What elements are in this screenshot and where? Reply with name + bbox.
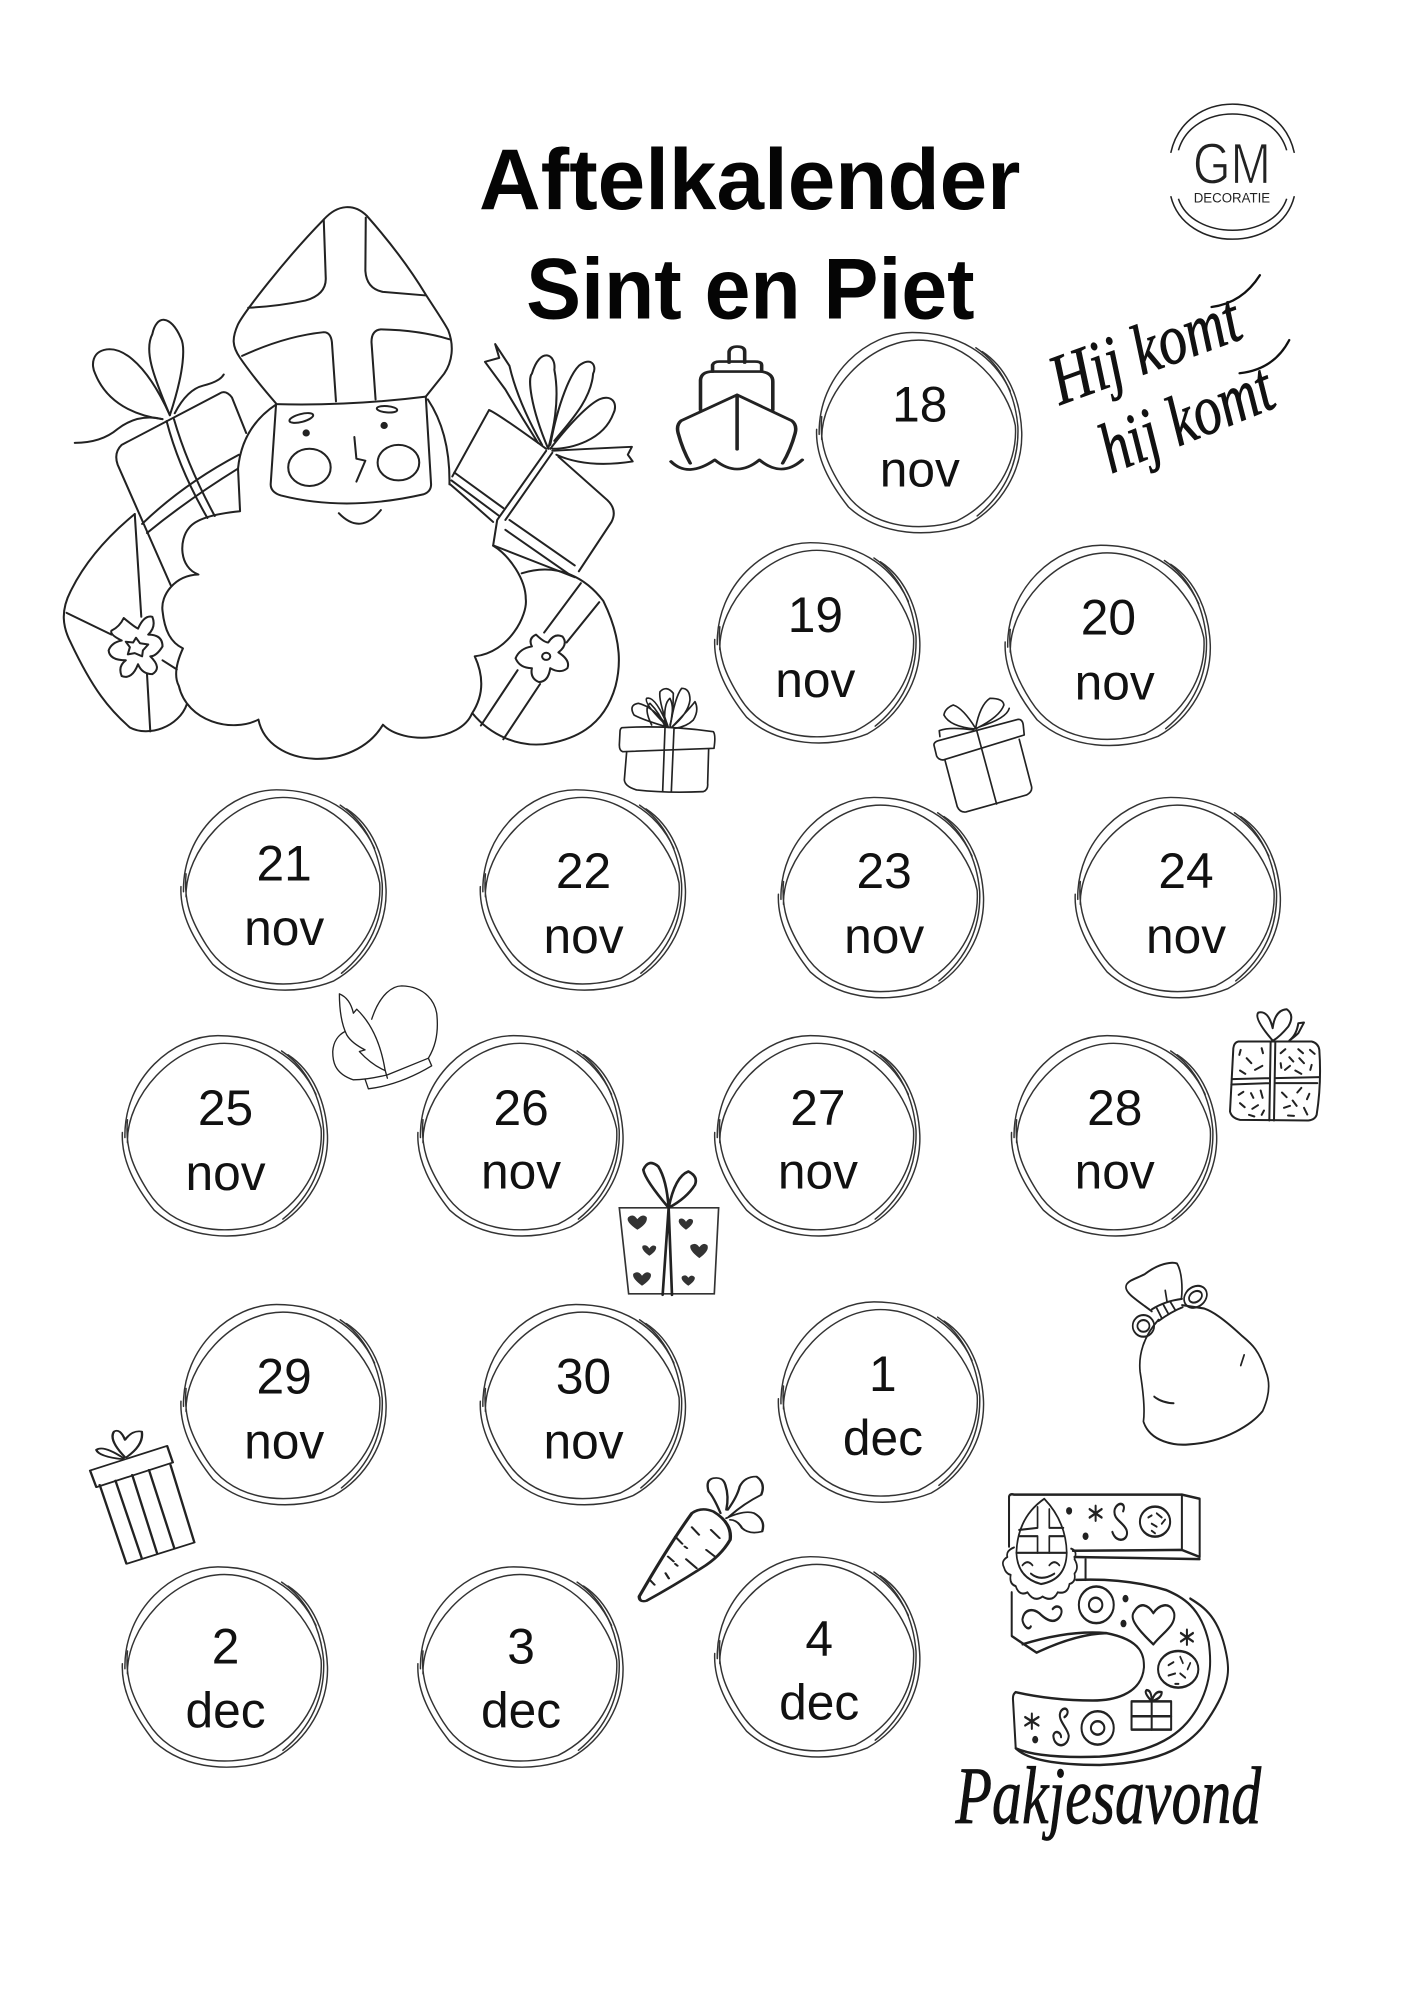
illustration: Sinterklaas with presents — [64, 207, 633, 759]
handwritten text: Hij komt hij komt — [1038, 275, 1289, 489]
mitre — [234, 207, 452, 404]
handwritten text: Hij komt hij komt: Hij komt — [1038, 278, 1253, 420]
title: Aftelkalender — [479, 132, 1020, 228]
present: bottom left with flower — [64, 514, 187, 731]
date circle: 28 nov — [1011, 1036, 1217, 1236]
date circle: 30 nov: 30 — [556, 1349, 611, 1405]
date circle: 28 nov: 28 — [1087, 1080, 1142, 1136]
date circle: 19 nov — [715, 543, 920, 743]
present: top right — [450, 344, 633, 577]
date circle: 3 dec: dec — [481, 1682, 561, 1738]
date circle: 19 nov: nov — [775, 652, 856, 708]
date circle: 27 nov: 27 — [790, 1080, 846, 1136]
date circle: 24 nov: nov — [1146, 908, 1226, 964]
icon: present with sprinkles — [1230, 1009, 1320, 1121]
icon: ship — [671, 347, 802, 470]
date circle: 18 nov: nov — [880, 442, 960, 498]
date circle: 4 dec: 4 — [805, 1611, 833, 1667]
date circle: 4 dec — [715, 1557, 920, 1757]
date circle: 26 nov: nov — [481, 1144, 561, 1200]
date circle: 20 nov: 20 — [1081, 589, 1136, 645]
date circle: 23 nov — [778, 797, 984, 998]
date circle: 23 nov: nov — [844, 908, 924, 964]
date circle: 27 nov — [715, 1036, 920, 1236]
logo: GM Decoratie: GM — [1193, 132, 1271, 196]
date circle: 29 nov: 29 — [257, 1349, 312, 1405]
date circle: 18 nov — [817, 332, 1022, 533]
title: Sint en Piet — [526, 241, 975, 337]
date circle: 21 nov: nov — [244, 900, 324, 956]
icon: sack — [1126, 1263, 1269, 1445]
date circle: 28 nov: nov — [1075, 1144, 1155, 1200]
date circle: 23 nov: 23 — [857, 843, 912, 899]
beard — [162, 399, 526, 759]
date circle: 1 dec: dec — [843, 1410, 923, 1466]
decorations — [1022, 1504, 1198, 1745]
date circle: 3 dec: 3 — [507, 1619, 535, 1675]
handwritten text: Hij komt hij komt: hij komt — [1087, 347, 1286, 489]
date circle: 21 nov: 21 — [257, 835, 312, 891]
date circle: 18 nov: 18 — [892, 377, 947, 433]
number five body — [1009, 1494, 1228, 1765]
date circle: 1 dec — [778, 1302, 984, 1502]
date circle: 3 dec — [418, 1567, 623, 1767]
present: bottom right with flower — [473, 570, 619, 745]
date circle: 2 dec: 2 — [212, 1619, 239, 1675]
date circle: 25 nov — [122, 1036, 328, 1236]
present: top left — [75, 320, 246, 585]
date circle: 26 nov — [418, 1036, 623, 1236]
icon: mitre and feather — [333, 986, 437, 1089]
icon: present with hearts — [619, 1163, 719, 1295]
date circle: 25 nov: 25 — [198, 1080, 253, 1136]
date circle: 30 nov: nov — [543, 1414, 624, 1470]
icon: tilted present — [934, 698, 1032, 812]
date circle: 27 nov: nov — [778, 1144, 858, 1200]
date circle: 19 nov: 19 — [788, 587, 843, 643]
face — [271, 397, 431, 524]
icon: present with big bow — [619, 688, 715, 792]
icon: carrot — [639, 1477, 763, 1601]
icon: chocolate letter five — [1003, 1494, 1228, 1765]
date circle: 30 nov — [480, 1304, 685, 1505]
logo: GM Decoratie — [1171, 104, 1294, 239]
date circle: 25 nov: nov — [186, 1145, 266, 1201]
date circle: 2 dec — [122, 1567, 328, 1767]
date circle: 21 nov — [181, 790, 386, 990]
date circle: 22 nov — [480, 790, 685, 990]
logo: GM Decoratie: DECORATIE — [1194, 190, 1270, 206]
date circle: 29 nov — [181, 1304, 386, 1505]
date circle: 1 dec: 1 — [869, 1346, 897, 1402]
handwritten text: Pakjesavond: Pakjesavond — [955, 1750, 1261, 1841]
date circle: 24 nov: 24 — [1158, 843, 1214, 899]
date circle: 29 nov: nov — [244, 1414, 324, 1470]
date circle: 20 nov — [1005, 545, 1210, 746]
date circle: 22 nov: 22 — [556, 843, 611, 899]
date circle: 20 nov: nov — [1075, 654, 1155, 710]
date circle: 22 nov: nov — [543, 908, 624, 964]
icon: present with stripes — [90, 1431, 194, 1564]
date circle: 26 nov: 26 — [493, 1080, 549, 1136]
date circle: 24 nov — [1075, 797, 1280, 998]
date circle: 2 dec: dec — [186, 1682, 266, 1738]
date circle: 4 dec: dec — [779, 1675, 859, 1731]
title — [479, 132, 1020, 337]
small Sint head — [1003, 1499, 1077, 1599]
